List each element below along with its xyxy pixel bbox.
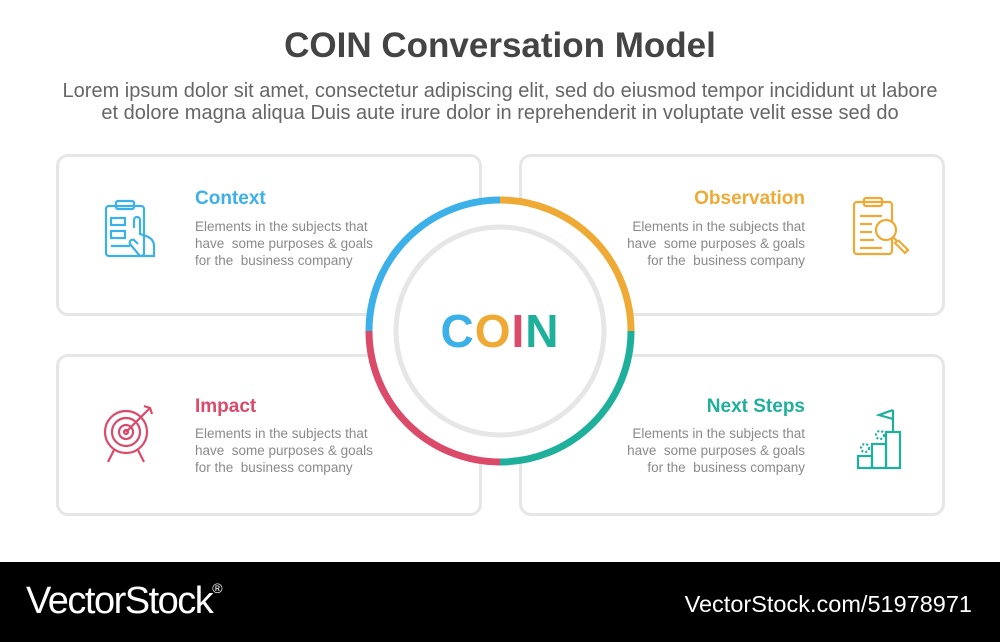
central ring: [366, 196, 634, 466]
heading: Next Steps: Next Steps: [707, 396, 805, 417]
heading: Context: Context: [195, 188, 266, 209]
text: impact: [195, 426, 373, 475]
text: observation: have some purposes & goals: [627, 236, 805, 251]
icon: steps flag: [856, 409, 902, 470]
panel: impact box: [56, 354, 482, 516]
text: impact: for the business company: [195, 460, 353, 475]
footer brand: VectorStock®: [26, 580, 221, 622]
subtitle: Lorem ipsum dolor sit amet, consectetur adipiscing elit, sed do eiusmod tempor incididunt ut labore: [63, 80, 937, 102]
title: COIN Conversation Model: [284, 26, 716, 65]
text: observation: for the business company: [647, 253, 805, 268]
text: next steps: have some purposes & goals: [627, 443, 805, 458]
footer bar: [0, 562, 1000, 642]
text: next steps: for the business company: [647, 460, 805, 475]
panel: context box: [56, 154, 482, 316]
footer url: VectorStock.com/51978971: [685, 591, 972, 617]
text: impact: Elements in the subjects that: [195, 426, 368, 441]
text: next steps: [627, 426, 805, 475]
text: context: for the business company: [195, 253, 353, 268]
text: next steps: Elements in the subjects that: [632, 426, 805, 441]
icon: clipboard hand: [104, 200, 156, 258]
text: context: Elements in the subjects that: [195, 219, 368, 234]
panel: next steps box: [519, 354, 945, 516]
text: observation: Elements in the subjects that: [632, 219, 805, 234]
heading: Observation: Observation: [694, 188, 805, 209]
center label COIN: COIN: [440, 305, 560, 357]
heading: Impact: Impact: [195, 396, 256, 417]
icon: clipboard magnifier: [852, 196, 910, 256]
subtitle: et dolore magna aliqua Duis aute irure dolor in reprehenderit in voluptate velit esse sed do: [101, 102, 899, 124]
text: observation: [627, 219, 805, 268]
panel: observation box: [519, 154, 945, 316]
subtitle: [63, 80, 937, 124]
text: context: [195, 219, 373, 268]
text: context: have some purposes & goals: [195, 236, 373, 251]
icon: target: [104, 405, 153, 462]
text: impact: have some purposes & goals: [195, 443, 373, 458]
